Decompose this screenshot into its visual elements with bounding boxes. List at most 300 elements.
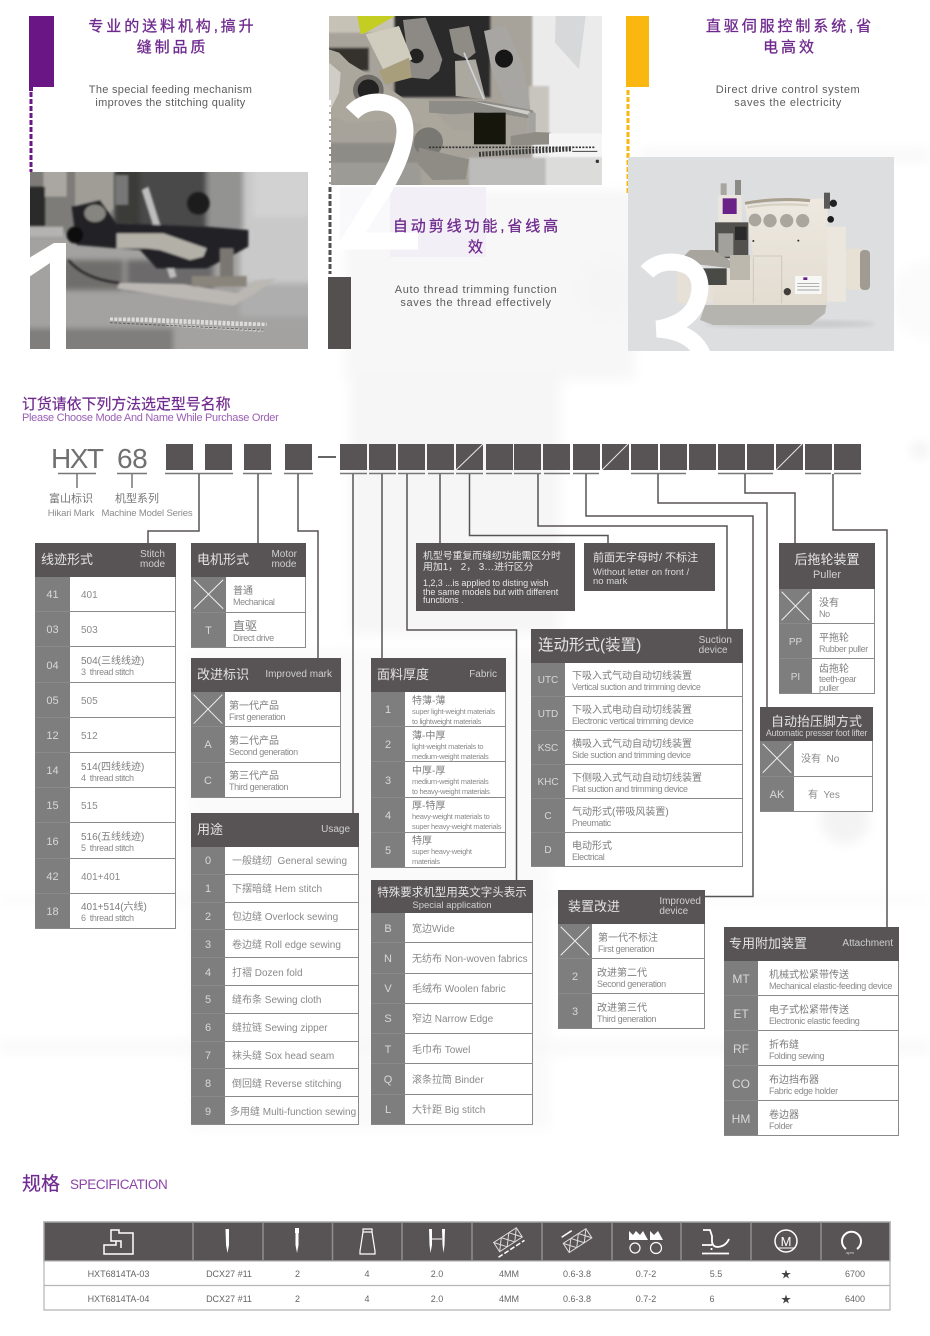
rows: lifter options: 没有 No <box>801 754 839 765</box>
header: stitch mode: mode <box>140 559 165 570</box>
rows: stitch options: 15 <box>46 800 59 812</box>
panel: stitch mode <box>35 543 176 929</box>
row: HXT6814TA-04: ★ <box>781 1295 791 1306</box>
rows: motor options: 普通 <box>233 586 253 597</box>
rows: stitch options: 503 <box>81 625 98 636</box>
rows: usage options: 4 <box>205 967 211 979</box>
photos and big numbers <box>29 16 894 351</box>
header: fabric <box>371 658 506 692</box>
rows: usage options: 缝拉链 Sewing zipper <box>232 1023 328 1034</box>
row: HXT6814TA-03: 4 <box>364 1269 370 1279</box>
rows: special options: T <box>385 1044 391 1056</box>
text: feature 2 english: Auto thread trimming function <box>395 284 557 296</box>
header: attachment: Attachment <box>842 938 893 949</box>
rows: suction options: 气动形式(带吸风装置) <box>572 807 669 818</box>
rows: stitch options: 5 thread stitch <box>81 843 134 853</box>
callout: no letter note: Without letter on front / <box>593 567 689 578</box>
rows: usage options: 一般缝纫 General sewing <box>232 856 347 867</box>
header: stitch mode: Stitch <box>140 549 165 560</box>
rows: stitch options: 401+514(六线) <box>81 902 147 913</box>
rows: suction options: Flat suction and trimming device <box>572 784 688 794</box>
text: feature 1 english: The special feeding mechanism <box>89 84 252 96</box>
rows: attachment options: ET <box>733 1007 749 1021</box>
row: HXT6814TA-04: HXT6814TA-04 <box>88 1294 149 1304</box>
rows: stitch options: 16 <box>46 836 59 848</box>
header: special application: Special application <box>412 900 492 911</box>
row: HXT6814TA-03 <box>88 1269 865 1281</box>
rows: suction options: Pneumatic <box>572 818 611 828</box>
rows: fabric options: medium-weight materials <box>412 777 488 786</box>
header: lifter <box>760 707 873 741</box>
label: machine model series: 机型系列 <box>115 493 159 505</box>
rows: generations: A <box>204 739 212 751</box>
text: feature 3 english: saves the electricity <box>734 97 842 109</box>
callout: no letter note <box>584 543 715 591</box>
header: stitch mode <box>35 543 176 577</box>
rows: lifter options: AK <box>770 789 784 801</box>
header: stitch mode: 线迹形式 <box>41 552 93 567</box>
rows: stitch options: 505 <box>81 696 98 707</box>
row: HXT6814TA-03: 2.0 <box>431 1269 443 1279</box>
row: HXT6814TA-04: 0.6-3.8 <box>563 1294 591 1304</box>
header: puller: 后拖轮装置 <box>794 552 860 567</box>
rows: fabric options: light-weight materials to <box>412 742 483 751</box>
big number 2 <box>350 102 418 241</box>
row: HXT6814TA-04: 4MM <box>499 1294 519 1304</box>
row: HXT6814TA-04: DCX27 #11 <box>206 1294 252 1304</box>
callout: repeat model note: the same models but with different <box>423 586 558 596</box>
rows: suction options <box>531 663 742 866</box>
rows: fabric options: 2 <box>385 739 391 751</box>
heading english: SPECIFICATION <box>70 1177 167 1192</box>
rows: usage options: 卷边缝 Roll edge sewing <box>232 940 341 951</box>
rows: puller options: 平拖轮 <box>819 632 849 644</box>
arrow: no letter note <box>470 474 608 543</box>
rows: device generations: 第一代不标注 <box>598 932 658 944</box>
rows: suction options: 横吸入式气动自动切线装置 <box>572 739 692 750</box>
text: feature 1 english: improves the stitching quality <box>95 97 246 109</box>
callout: repeat model note: 机型号重复而缝纫功能需区分时 <box>423 551 561 562</box>
rows: suction options: Electronic vertical trimming device <box>572 716 693 726</box>
row: HXT6814TA-03: 0.6-3.8 <box>563 1269 591 1279</box>
rows: lifter options <box>760 741 872 811</box>
text: feature 2 english: saves the thread effectively <box>400 297 552 309</box>
rows: stitch options: 401+401 <box>81 872 120 883</box>
heading: feature 2: 效 <box>468 239 486 256</box>
rows: device generations: 改进第二代 <box>597 968 647 978</box>
rows: stitch options: 516(五线线迹) <box>81 832 144 843</box>
rows: special options: L <box>385 1104 391 1116</box>
callout: repeat model note: 1,2,3 ...is applied to disting wish <box>423 578 548 588</box>
arrow: special application <box>407 474 516 880</box>
rows: suction options: 下吸入式气动自动切线装置 <box>572 671 692 682</box>
panel: suction device <box>531 629 743 867</box>
rows: generations: C <box>204 775 212 787</box>
title english: Please Choose Mode And Name While Purchase Order <box>22 412 278 424</box>
rows: motor options: 直驱 <box>233 619 257 633</box>
row: HXT6814TA-03: DCX27 #11 <box>206 1269 252 1279</box>
rows: fabric options: 1 <box>385 704 391 716</box>
rows: suction options: Electrical <box>572 852 604 862</box>
big number 1 <box>29 243 66 349</box>
panel: feature 1 feeding mechanism <box>88 18 257 109</box>
model series 68: 68 <box>117 443 147 474</box>
rows: generations <box>191 692 340 797</box>
panel: fabric thickness <box>371 658 506 868</box>
rows: attachment options: HM <box>732 1112 750 1126</box>
header: improved device <box>558 890 705 924</box>
header: suction device: 连动形式(装置) <box>538 637 641 654</box>
heading: feature 1: 专业的送料机构,搞升 <box>88 18 257 35</box>
rows: attachment options: Mechanical elastic-feeding device <box>769 980 892 990</box>
callout: no letter note: 前面无字母时/ 不标注 <box>593 552 698 564</box>
rows: suction options: UTC <box>538 675 558 686</box>
rows: special options <box>371 913 532 1124</box>
rows: puller options: PI <box>791 672 800 682</box>
rows: usage options: 倒回缝 Reverse stitching <box>232 1079 341 1090</box>
rows: stitch options: 12 <box>46 730 59 742</box>
rows: fabric options: 薄-中厚 <box>412 731 445 742</box>
icon: motor: M <box>781 1234 791 1249</box>
model prefix HXT: HXT <box>51 443 102 474</box>
heading: feature 2: 自动剪线功能,省线高 <box>393 218 561 235</box>
rows: suction options: Vertical suction and trimming device <box>572 682 700 692</box>
arrow: attachment <box>833 474 887 927</box>
header: lifter: Automatic presser foot lifter <box>766 728 867 738</box>
text: feature 3 english <box>716 84 860 109</box>
rows: fabric options: 4 <box>385 810 391 822</box>
arrow: motor mode <box>257 474 259 543</box>
row: HXT6814TA-03: ★ <box>781 1270 791 1281</box>
accent bar and dashes: yellow <box>626 16 649 193</box>
panel: improved device <box>558 890 705 1029</box>
icon: needle gauge <box>429 1229 445 1253</box>
rows: puller options: puller <box>819 682 839 692</box>
rows: usage options: 袜头缝 Sox head seam <box>232 1051 334 1062</box>
rows: device generations <box>558 924 704 1028</box>
label: Hikari mark <box>48 492 94 519</box>
header: attachment <box>724 927 899 961</box>
rows: special options: 大针距 Big stitch <box>412 1105 485 1116</box>
heading chinese: 规格 <box>22 1174 60 1195</box>
rows: attachment options: RF <box>733 1042 749 1056</box>
rows: attachment options: Folder <box>769 1120 792 1130</box>
rows: attachment options: MT <box>732 972 750 986</box>
rows: puller options: PP <box>789 636 802 648</box>
panel: improved mark <box>191 658 341 798</box>
rows: device generations: Third generation <box>597 1014 656 1024</box>
rows: fabric options: medium-weight materials <box>412 752 488 761</box>
rows: stitch options: 514(四线线迹) <box>81 762 144 773</box>
rows: attachment options: CO <box>732 1077 750 1091</box>
rows: device generations: 改进第三代 <box>597 1002 647 1014</box>
rows: suction options: D <box>544 845 552 856</box>
rows: attachment options: 电子式松紧带传送 <box>769 1004 849 1016</box>
rows: attachment options: 布边挡布器 <box>769 1074 819 1086</box>
rows: fabric options: super light-weight materials <box>412 707 495 716</box>
rows: generations: 第三代产品 <box>229 771 279 782</box>
icon: needle <box>226 1229 229 1253</box>
rows: stitch options: 04 <box>46 660 59 672</box>
panel: attachment <box>724 927 899 1136</box>
rows: suction options: Side suction and trimming device <box>572 750 691 760</box>
rows: usage options: 9 <box>205 1106 211 1118</box>
rows: generations: First generation <box>229 712 285 722</box>
rows: attachment options: Folding sewing <box>769 1050 824 1060</box>
rows: suction options: 下吸入式电动自动切线装置 <box>572 705 692 716</box>
rows: special options: 宽边Wide <box>412 924 455 935</box>
panel: automatic presser foot lifter <box>760 707 873 812</box>
callout: no letter note: no mark <box>593 576 627 586</box>
rows: stitch options: 4 thread stitch <box>81 773 134 783</box>
rows: stitch options: 03 <box>46 624 59 636</box>
header: motor mode <box>191 543 306 577</box>
rows: special options: S <box>384 1013 392 1025</box>
rows: puller options: No <box>819 608 830 618</box>
photo: thread trimming close-up <box>326 13 602 189</box>
rows: motor options: Mechanical <box>233 597 275 607</box>
rows: fabric options: 5 <box>385 845 391 857</box>
bracket underlines <box>58 474 861 488</box>
header: motor mode: 电机形式 <box>197 552 249 567</box>
row: HXT6814TA-03: 4MM <box>499 1269 519 1279</box>
header: fabric: 面料厚度 <box>377 667 429 682</box>
arrow: improved device <box>586 474 753 896</box>
header: improved device: 装置改进 <box>568 899 620 914</box>
rows: special options: 滚条拉筒 Binder <box>412 1075 484 1086</box>
rows: stitch options: 05 <box>46 695 59 707</box>
heading: feature 3: 直驱伺服控制系统,省 <box>706 18 874 35</box>
rows: fabric options: super heavy-weight <box>412 847 472 856</box>
rows: motor options: Direct drive <box>233 633 274 643</box>
heading: feature 3: 电高效 <box>763 39 817 56</box>
rows: puller options: Rubber puller <box>819 644 868 654</box>
arrow: auto lifter <box>658 474 767 707</box>
panel: feature 2 thread trimming <box>393 218 561 309</box>
rows: special options: 无纺布 Non-woven fabrics <box>412 954 528 965</box>
rows: generations: 第二代产品 <box>229 736 279 747</box>
header: puller <box>779 543 875 589</box>
rows: puller options: teeth-gear <box>819 674 856 684</box>
rows: puller options <box>779 589 874 693</box>
row: HXT6814TA-03: 6700 <box>845 1269 865 1279</box>
header: special application: 特殊要求机型用英文字头表示 <box>377 887 527 899</box>
rows: attachment options: 机械式松紧带传送 <box>769 970 849 980</box>
row: HXT6814TA-04: 2 <box>295 1294 300 1304</box>
panel: usage <box>191 813 359 1125</box>
heading: feature 1 <box>88 18 257 56</box>
icon: machine <box>104 1230 133 1254</box>
row: HXT6814TA-03: 2 <box>295 1269 300 1279</box>
rows: special options: B <box>384 923 392 935</box>
rows: special options: N <box>384 953 392 965</box>
panel: motor mode <box>191 543 306 648</box>
rows: suction options: UTD <box>538 709 558 720</box>
arrow: stitch mode <box>148 474 199 543</box>
arrow: suction device <box>538 474 727 629</box>
rows: special options: Q <box>384 1074 392 1086</box>
header: improved mark <box>191 658 341 692</box>
rows: puller options: 没有 <box>819 598 839 608</box>
row: HXT6814TA-04: 6 <box>709 1294 715 1304</box>
rows: stitch options: 3 thread stitch <box>81 667 134 677</box>
photo: presser foot close-up <box>23 167 313 355</box>
panel: feature 3 direct drive <box>706 18 874 109</box>
icon: stitch length <box>560 1224 592 1253</box>
rows: special options: 毛绒布 Woolen fabric <box>412 984 506 995</box>
header: attachment: 专用附加装置 <box>729 936 807 951</box>
rows: attachment options: 卷边器 <box>769 1110 799 1120</box>
accent bar and dashes: dark <box>328 100 351 349</box>
heading: feature 1: 缝制品质 <box>137 39 208 56</box>
heading: order section <box>22 396 279 424</box>
rows: motor options: T <box>205 625 212 637</box>
icon: motor <box>775 1230 797 1252</box>
label: machine model series <box>102 492 192 519</box>
panel: puller <box>779 543 875 694</box>
arrow: puller <box>745 474 795 543</box>
header: motor mode: mode <box>271 559 296 570</box>
model code squares <box>166 444 861 470</box>
accent bar and dashes: purple <box>29 16 54 172</box>
row: HXT6814TA-04: 2.0 <box>431 1294 443 1304</box>
slashes on fixed squares <box>456 444 802 470</box>
rows: usage options: 8 <box>205 1078 211 1090</box>
rows: generations: Third generation <box>229 782 288 792</box>
rows: suction options: 电动形式 <box>572 841 612 852</box>
header: suction device <box>531 629 743 663</box>
label: Hikari mark: 富山标识 <box>49 493 93 505</box>
text: feature 2 english <box>394 284 557 309</box>
rows: attachment options <box>724 961 898 1135</box>
label: machine model series: Machine Model Series <box>102 508 192 519</box>
rows: fabric options: 中厚-厚 <box>412 766 445 777</box>
rows: motor options <box>191 577 305 647</box>
rows: attachment options: Electronic elastic feeding <box>769 1016 859 1026</box>
heading: feature 2 <box>393 218 561 256</box>
row: HXT6814TA-04 <box>88 1294 865 1306</box>
rows: stitch options: 41 <box>46 589 59 601</box>
callout: repeat model note: functions . <box>423 595 463 605</box>
icon: needle count <box>295 1228 299 1253</box>
rows: fabric options: 特薄-薄 <box>412 696 445 707</box>
rows: suction options: C <box>544 811 552 822</box>
header: usage <box>191 813 359 847</box>
icon: presser foot lift <box>702 1230 729 1254</box>
rows: fabric options: to heavy-weight materials <box>412 787 490 796</box>
rows: usage options: 缝布条 Sewing cloth <box>232 995 321 1006</box>
rows: fabric options: 厚-特厚 <box>412 801 445 812</box>
rows: special options: V <box>384 983 392 995</box>
big number 3 <box>647 262 708 400</box>
rows: usage options: 6 <box>205 1022 211 1034</box>
header: suction device: device <box>699 645 728 656</box>
icon: speed <box>842 1232 861 1255</box>
rows: stitch options: 14 <box>46 765 59 777</box>
rows: stitch options: 6 thread stitch <box>81 913 134 923</box>
heading: feature 3 <box>706 18 874 56</box>
icon: thread cone <box>360 1229 375 1254</box>
header: suction device: Suction <box>699 635 732 646</box>
panel: special application <box>371 880 533 1125</box>
rows: fabric options: materials <box>412 857 440 866</box>
rows: usage options: 打褶 Dozen fold <box>232 968 303 979</box>
callout: repeat model note: 用加1， 2， 3…进行区分 <box>423 562 534 573</box>
rows: usage options: 下摆暗缝 Hem stitch <box>232 884 322 895</box>
title chinese: 订货请依下列方法选定型号名称 <box>22 397 230 413</box>
rows: puller options: 齿拖轮 <box>819 664 849 675</box>
arrow: usage <box>352 474 354 813</box>
rows: fabric options: to lightweight materials <box>412 717 481 726</box>
rows: device generations: 2 <box>572 971 578 983</box>
rows: suction options: 下侧吸入式气动自动切线装置 <box>572 773 702 784</box>
rows: fabric options <box>371 692 505 867</box>
arrow: repeat note <box>439 474 441 543</box>
rows: usage options: 0 <box>205 855 211 867</box>
rows: suction options: KSC <box>538 743 558 754</box>
rows: stitch options: 42 <box>46 871 59 883</box>
rows: fabric options: 特厚 <box>412 836 432 847</box>
rows: device generations: First generation <box>598 944 654 954</box>
header: puller: Puller <box>813 569 841 581</box>
icon: speed: spm <box>846 1250 854 1255</box>
rows: device generations: Second generation <box>597 978 666 988</box>
rows: attachment options: 折布缝 <box>769 1040 799 1050</box>
rows: usage options: 3 <box>205 939 211 951</box>
row: HXT6814TA-04: 6400 <box>845 1294 865 1304</box>
arrow: fabric <box>381 474 383 658</box>
rows: generations: 第一代产品 <box>229 701 279 712</box>
rows: usage options: 7 <box>205 1050 211 1062</box>
callout: repeat model note <box>416 543 575 611</box>
header: motor mode: Motor <box>271 549 297 560</box>
rows: suction options: KHC <box>537 777 559 788</box>
rows: generations: Second generation <box>229 747 298 757</box>
rows: usage options: 2 <box>205 911 211 923</box>
header: usage: Usage <box>321 824 350 835</box>
icon: overlock width <box>490 1228 524 1257</box>
rows: device generations: 3 <box>572 1006 578 1018</box>
heading: specification <box>22 1174 167 1195</box>
label: Hikari mark: Hikari Mark <box>48 508 94 519</box>
rows: lifter options: 有 Yes <box>808 790 840 801</box>
header: lifter: 自动抬压脚方式 <box>771 714 862 729</box>
table header band <box>44 1222 890 1261</box>
header: improved mark: Improved mark <box>265 669 332 680</box>
row: HXT6814TA-04: 0.7-2 <box>636 1294 656 1304</box>
row: HXT6814TA-03: 0.7-2 <box>636 1269 656 1279</box>
icon: differential feed <box>629 1231 663 1254</box>
rows: usage options: 5 <box>205 994 211 1006</box>
rows: stitch options <box>35 577 175 928</box>
table rows <box>44 1261 890 1310</box>
header: improved device: device <box>659 906 688 917</box>
row: HXT6814TA-04: 4 <box>364 1294 370 1304</box>
header: special application <box>371 880 533 913</box>
text: feature 1 english <box>89 84 252 109</box>
rows: stitch options: 512 <box>81 731 98 742</box>
header: improved device: Improved <box>659 896 701 907</box>
rows: usage options: 包边缝 Overlock sewing <box>232 912 338 923</box>
rows: fabric options: 3 <box>385 774 391 786</box>
rows: fabric options: heavy-weight materials to <box>412 812 490 821</box>
rows: stitch options: 401 <box>81 590 98 601</box>
rows: usage options: 1 <box>205 883 211 895</box>
text: feature 3 english: Direct drive control system <box>716 84 860 96</box>
header: improved mark: 改进标识 <box>197 667 249 682</box>
rows: special options: 窄边 Narrow Edge <box>412 1014 493 1025</box>
rows: fabric options: super heavy-weight materials <box>412 822 501 831</box>
